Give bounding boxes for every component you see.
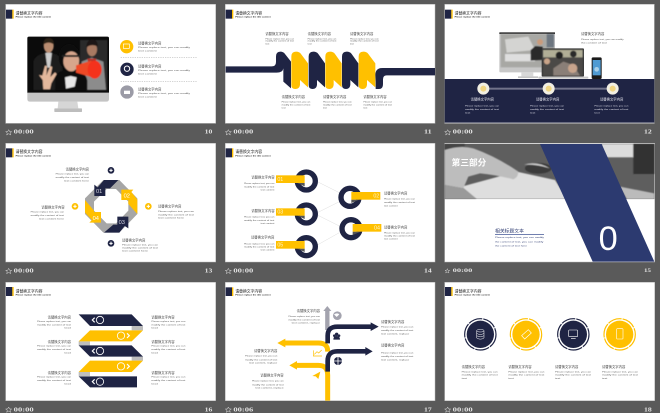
footer: 15 xyxy=(644,268,651,274)
captions: Please replace text, you can xyxy=(350,37,380,40)
header xyxy=(226,148,271,157)
connector lines xyxy=(317,182,339,245)
point 2 xyxy=(120,63,191,76)
captions: Please replace text, you can xyxy=(282,101,311,104)
captions: Please replace text, you can xyxy=(602,371,639,374)
rings and tabs: 02 xyxy=(373,194,379,200)
circle icon: database xyxy=(465,319,496,350)
captions: text content xyxy=(384,238,398,241)
captions: 请替换文字内容 xyxy=(282,94,306,99)
captions: Please replace text, you can xyxy=(37,345,72,348)
captions: 请替换文字内容 xyxy=(151,370,175,375)
captions: modify the content of text xyxy=(323,103,352,106)
footer: 00:00 xyxy=(233,267,254,274)
captions: 请替换文字内容 xyxy=(151,339,175,344)
circle icon: ticket xyxy=(510,319,542,350)
captions: text xyxy=(282,106,286,109)
rings and tabs xyxy=(276,172,381,256)
captions: Please replace text, you can xyxy=(245,355,278,358)
captions: text xyxy=(64,382,72,385)
captions: 请替换文字内容 xyxy=(462,364,486,369)
captions: text xyxy=(602,377,608,380)
header: Please replace the title content xyxy=(455,294,490,297)
captions: text xyxy=(323,106,327,109)
octagon cycle diagram: 02 xyxy=(124,194,130,200)
header xyxy=(6,148,51,157)
captions: Please replace text, you can xyxy=(381,326,414,329)
captions: Please replace text, you can xyxy=(37,376,72,379)
captions: 请替换文字内容 xyxy=(41,204,65,209)
captions: modify the content of text xyxy=(363,103,392,106)
captions: 请替换文字内容 xyxy=(363,94,387,99)
footer xyxy=(6,406,213,413)
captions: 请替换文字内容 xyxy=(602,364,626,369)
point 1 xyxy=(120,40,191,53)
point 2: Please replace text, you can modify xyxy=(138,69,191,72)
point 1: Please replace text, you can modify xyxy=(138,46,191,49)
slide 10: monitor with three points xyxy=(6,4,216,136)
captions: modify the content of text xyxy=(244,246,275,249)
captions: 请替换文字内容 xyxy=(122,237,146,242)
footer xyxy=(6,267,213,274)
captions: Please replace text, you can xyxy=(555,371,592,374)
header: 请替换文字内容 xyxy=(455,288,482,293)
captions xyxy=(31,167,195,253)
captions: text xyxy=(555,377,561,380)
captions: text content xyxy=(261,222,275,225)
captions: text xyxy=(64,351,72,354)
octagon cycle diagram: 03 xyxy=(119,220,125,226)
captions: Please replace text, you can xyxy=(462,371,499,374)
captions: modify the content of text xyxy=(244,219,275,222)
captions: text xyxy=(508,377,514,380)
point 3: text content xyxy=(138,95,157,98)
captions: text xyxy=(265,43,270,46)
octagon cycle diagram xyxy=(85,180,137,233)
captions: Please replace text, you can xyxy=(151,345,186,348)
octagon cycle diagram: 04 xyxy=(93,216,99,222)
captions: text content xyxy=(384,204,398,207)
captions: modify the content of text xyxy=(37,348,72,351)
heading block: 请替换文字内容 xyxy=(581,31,605,36)
captions: text content here xyxy=(122,250,149,253)
captions: 请替换文字内容 xyxy=(323,94,347,99)
captions: text content xyxy=(261,189,275,192)
captions: modify the content of text xyxy=(151,379,186,382)
captions: 请替换文字内容 xyxy=(251,174,275,179)
header: Please replace the title content xyxy=(16,294,51,297)
footer xyxy=(225,267,432,274)
point 3: Please replace text, you can modify xyxy=(138,92,191,95)
captions: modify the content of text xyxy=(384,235,416,238)
captions: 请替换文字内容 xyxy=(251,235,275,240)
captions: Please replace text, you can xyxy=(265,37,295,40)
header: Please replace the title content xyxy=(455,16,490,19)
captions: modify the content of text xyxy=(122,247,159,250)
octagon cycle diagram: 01 xyxy=(96,189,102,195)
captions: Please replace text, you can xyxy=(31,210,65,213)
captions: 请替换文字内容 xyxy=(350,31,374,36)
captions: text xyxy=(462,377,468,380)
header xyxy=(445,10,490,19)
captions: 请替换文字内容 xyxy=(260,372,284,377)
captions: modify the content of text xyxy=(602,374,639,377)
header: Please replace the title content xyxy=(235,294,271,297)
captions: modify the content of text xyxy=(288,318,321,321)
subtitle block: the content of text, you can modify xyxy=(495,240,545,243)
captions: modify the content of text xyxy=(381,355,414,358)
timeline panel: modify the content of text xyxy=(465,108,500,111)
captions: 请替换文字内容 xyxy=(384,190,408,195)
captions: 请替换文字内容 xyxy=(381,319,405,324)
footer xyxy=(445,406,652,413)
rings and tabs: 03 xyxy=(277,210,283,216)
captions: Please replace text, you can xyxy=(363,101,393,104)
captions: 请替换文字内容 xyxy=(254,348,278,353)
point 2: text content xyxy=(138,72,157,75)
section number: 0 xyxy=(599,220,618,258)
footer: 11 xyxy=(424,129,432,136)
timeline panel: Please replace text, you can xyxy=(594,105,629,108)
captions: text content xyxy=(261,249,275,252)
slide 13: octagon cycle xyxy=(6,143,216,274)
captions: 请替换文字内容 xyxy=(251,208,275,213)
captions: text xyxy=(350,43,354,46)
monitor with photo xyxy=(27,37,109,112)
timeline panel: text xyxy=(465,111,471,114)
rings and tabs: 01 xyxy=(277,177,283,183)
captions: modify the content of text xyxy=(37,379,72,382)
captions: modify the content of text xyxy=(508,374,545,377)
header: 请替换文字内容 xyxy=(455,10,482,15)
timeline panel: 请替换文字内容 xyxy=(536,97,560,102)
slide 18: four circles xyxy=(445,282,655,413)
captions: Please replace text, you can xyxy=(323,101,353,104)
captions xyxy=(244,174,416,252)
captions: Please replace text, you can xyxy=(308,37,337,40)
captions: text content here xyxy=(158,217,185,220)
captions: text xyxy=(151,382,159,385)
captions: text content, replace xyxy=(381,333,410,336)
captions: 请替换文字内容 xyxy=(508,364,532,369)
header xyxy=(6,10,51,19)
captions: modify the content of text xyxy=(56,176,90,179)
captions: Please replace text, you can xyxy=(158,210,195,213)
footer xyxy=(445,129,652,136)
header: Please replace the title content xyxy=(16,154,51,157)
footer xyxy=(445,268,651,274)
captions: text content here xyxy=(64,180,90,183)
captions: Please replace text, you can xyxy=(508,371,545,374)
header: 请替换文字内容 xyxy=(16,149,43,154)
captions: modify the content of text xyxy=(158,213,195,216)
circle icon: phone xyxy=(604,319,635,350)
footer: 00:00 xyxy=(453,129,474,136)
captions: text content here xyxy=(39,217,65,220)
circle icon: monitor xyxy=(558,319,589,350)
captions: modify the content of text xyxy=(252,383,284,386)
captions: Please replace text, you can xyxy=(244,216,275,219)
footer xyxy=(225,129,432,136)
captions xyxy=(265,31,393,109)
captions: 请替换文字内容 xyxy=(308,31,332,36)
captions: 请替换文字内容 xyxy=(381,342,405,347)
timeline panel: text xyxy=(530,111,536,114)
captions: modify the content of text xyxy=(244,185,275,188)
captions: Please replace text, you can xyxy=(384,198,416,201)
captions: text xyxy=(64,327,72,330)
captions: 请替换文字内容 xyxy=(158,204,182,209)
header: Please replace the title content xyxy=(16,16,51,19)
captions: 请替换文字内容 xyxy=(48,339,72,344)
timeline panel: 请替换文字内容 xyxy=(600,97,624,102)
captions: text content, replace xyxy=(255,387,285,390)
timeline panel: text xyxy=(594,111,600,114)
captions xyxy=(462,364,639,380)
captions: 请替换文字内容 xyxy=(297,308,321,313)
captions: text content, replace xyxy=(292,322,321,325)
footer: 14 xyxy=(424,267,432,274)
timeline panel: modify the content of text xyxy=(530,108,565,111)
captions: modify the content of text xyxy=(384,201,416,204)
footer: 00:00 xyxy=(453,268,473,274)
subtitle block: 相关标题文本 xyxy=(495,228,524,235)
captions: modify the content of text xyxy=(151,323,186,326)
point 3: 请替换文字内容 xyxy=(138,86,162,91)
captions: modify the content of text xyxy=(151,348,186,351)
device mockups xyxy=(499,32,602,79)
timeline panel xyxy=(445,79,654,123)
footer: 00:00 xyxy=(14,267,35,274)
slide 12: devices with timeline xyxy=(445,4,654,136)
header: 请替换文字内容 xyxy=(16,10,43,15)
slide 17: branching arrows xyxy=(225,282,435,413)
header: 请替换文字内容 xyxy=(235,288,262,293)
diagonal band xyxy=(540,144,654,262)
captions: 请替换文字内容 xyxy=(48,315,72,320)
captions: modify the content of text xyxy=(555,374,592,377)
footer: 00:00 xyxy=(14,129,35,136)
captions: Please replace text, you can xyxy=(151,376,186,379)
captions: text xyxy=(363,106,368,109)
timeline panel: Please replace text, you can xyxy=(465,105,500,108)
captions: text xyxy=(151,351,159,354)
captions xyxy=(37,315,186,385)
captions: modify the content of text xyxy=(462,374,498,377)
captions: modify the content of text xyxy=(381,329,414,332)
captions: modify the content of text xyxy=(245,358,278,361)
footer xyxy=(225,406,432,413)
section title: 第三部分 xyxy=(452,157,487,168)
header: 请替换文字内容 xyxy=(235,10,262,15)
captions xyxy=(245,308,414,390)
header: 请替换文字内容 xyxy=(235,149,262,154)
captions: 请替换文字内容 xyxy=(48,370,72,375)
slide 15: section divider xyxy=(445,143,655,274)
header: Please replace the title content xyxy=(235,154,271,157)
ribbon wave xyxy=(226,52,435,89)
folded ribbon xyxy=(79,314,143,387)
header: 请替换文字内容 xyxy=(16,288,43,293)
slide 11: ribbon wave xyxy=(225,4,435,136)
captions: text xyxy=(151,327,159,330)
footer xyxy=(6,129,213,136)
captions: Please replace text, you can xyxy=(244,182,275,185)
header: Please replace the title content xyxy=(235,16,271,19)
captions: Please replace text, you can xyxy=(37,320,72,323)
captions: modify the content of text xyxy=(282,103,311,106)
header xyxy=(6,287,51,297)
timeline panel: modify the content of text xyxy=(594,108,629,111)
header xyxy=(226,287,271,297)
captions: Please replace text, you can xyxy=(244,242,275,245)
captions: Please replace text, you can xyxy=(381,352,414,355)
slide 14: ring connectors xyxy=(225,143,435,274)
footer: 13 xyxy=(205,267,213,274)
subtitle block xyxy=(495,228,545,248)
header xyxy=(445,287,490,297)
captions: 请替换文字内容 xyxy=(555,364,579,369)
footer: 10 xyxy=(205,129,213,136)
captions: Please replace text, you can xyxy=(384,231,416,234)
footer: 12 xyxy=(644,129,652,136)
timeline panel: Please replace text, you can xyxy=(530,105,565,108)
captions: 请替换文字内容 xyxy=(384,224,408,229)
captions: Please replace text, you can xyxy=(122,243,159,246)
captions: text xyxy=(308,43,312,46)
captions: Please replace text, you can xyxy=(288,315,321,318)
captions: Please replace text, you can xyxy=(252,380,285,383)
timeline panel: 请替换文字内容 xyxy=(471,97,495,102)
rings and tabs: 05 xyxy=(277,243,283,249)
point 1: text content xyxy=(138,49,157,52)
branching arrows xyxy=(277,306,379,401)
point 1: 请替换文字内容 xyxy=(138,40,162,45)
captions: modify the content of text xyxy=(31,214,65,217)
subtitle block: the content of text here xyxy=(495,245,528,248)
captions: text content, replace xyxy=(381,358,410,361)
captions: 请替换文字内容 xyxy=(151,315,175,320)
keyboard photo xyxy=(445,144,654,199)
captions: 请替换文字内容 xyxy=(66,167,90,172)
point 3 xyxy=(120,85,191,99)
heading block xyxy=(581,31,625,44)
slide 16: folded ribbon xyxy=(6,282,216,413)
captions: Please replace text, you can xyxy=(56,173,90,176)
heading block: the content of text xyxy=(581,41,608,44)
captions: 请替换文字内容 xyxy=(265,31,289,36)
icons xyxy=(312,311,342,379)
footer: 00:00 xyxy=(233,129,254,136)
subtitle block: Please replace text, you can modify xyxy=(495,236,545,239)
header xyxy=(226,10,271,19)
rings and tabs: 04 xyxy=(374,225,380,231)
captions: modify the content of text xyxy=(37,323,72,326)
captions: modify the content of text xyxy=(265,40,294,43)
captions: modify the content of text xyxy=(350,40,379,43)
point 2: 请替换文字内容 xyxy=(138,63,162,68)
captions: Please replace text, you can xyxy=(151,320,186,323)
plus markers xyxy=(72,167,152,247)
heading block: Please replace text, you can modify xyxy=(581,38,625,41)
captions: modify the content of text xyxy=(308,40,337,43)
captions: text content, replace xyxy=(249,362,278,365)
